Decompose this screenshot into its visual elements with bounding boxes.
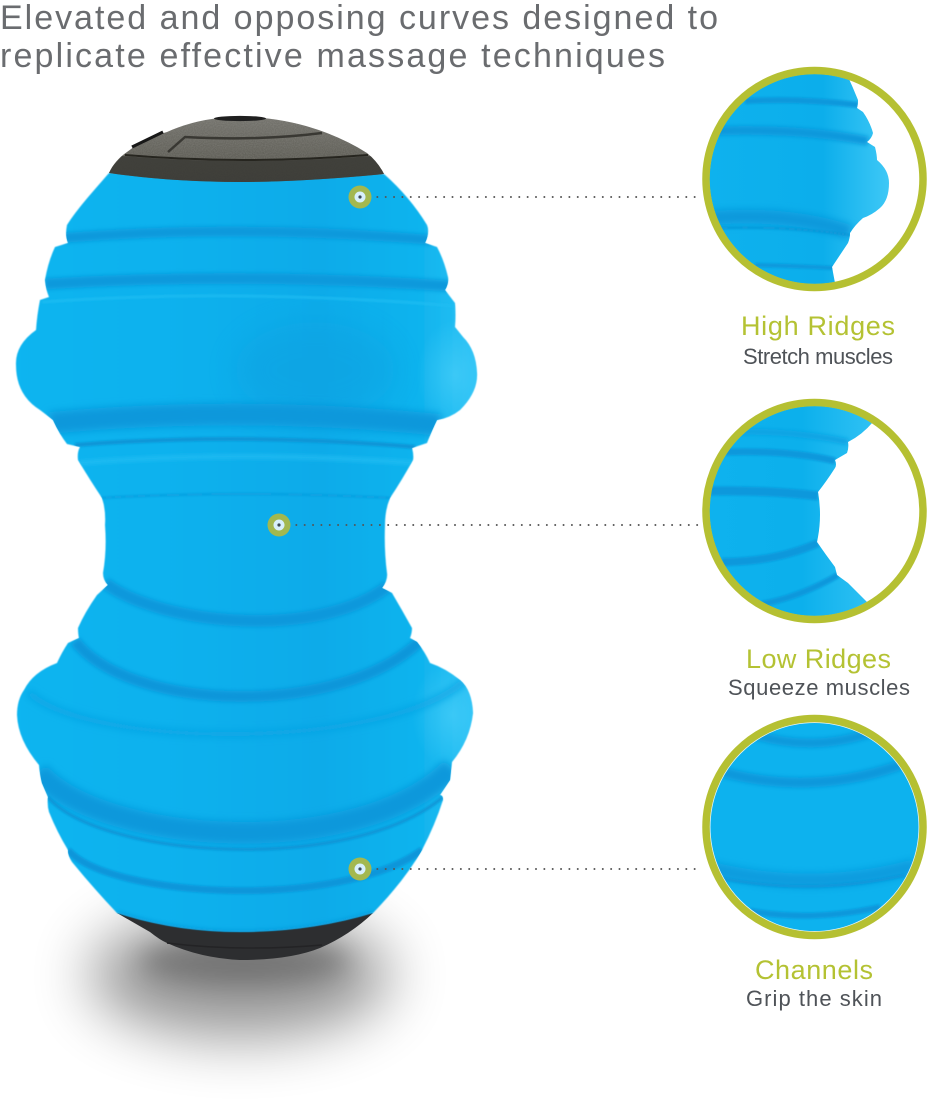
circle detail: low ridges <box>700 390 923 640</box>
blue massage ball body <box>16 173 493 932</box>
bottom black cap of massage ball <box>117 913 373 960</box>
label: high ridges: High Ridges <box>741 311 895 341</box>
label: high ridges <box>741 311 895 369</box>
callout marker: neck with dotted leader <box>268 514 698 536</box>
circle detail: channels <box>706 718 923 936</box>
circle detail: high ridges <box>700 60 923 300</box>
label: channels: Channels <box>755 955 873 985</box>
massage ball floor shadow <box>90 913 390 1037</box>
title <box>0 0 718 75</box>
label: channels: Grip the skin <box>746 986 882 1011</box>
title: Elevated and opposing curves designed to <box>0 0 718 37</box>
callout marker: channel with dotted leader <box>348 858 698 880</box>
label: high ridges: Stretch muscles <box>743 344 893 369</box>
ridge bands <box>62 231 432 240</box>
soft central shading <box>235 322 395 418</box>
label: low ridges <box>728 644 910 700</box>
label: low ridges: Low Ridges <box>746 644 891 674</box>
top black cap of massage ball <box>109 116 384 182</box>
title: replicate effective massage techniques <box>0 37 665 75</box>
label: low ridges: Squeeze muscles <box>728 675 910 700</box>
label: channels <box>746 955 882 1011</box>
callout marker: top ridge with dotted leader <box>348 186 698 208</box>
